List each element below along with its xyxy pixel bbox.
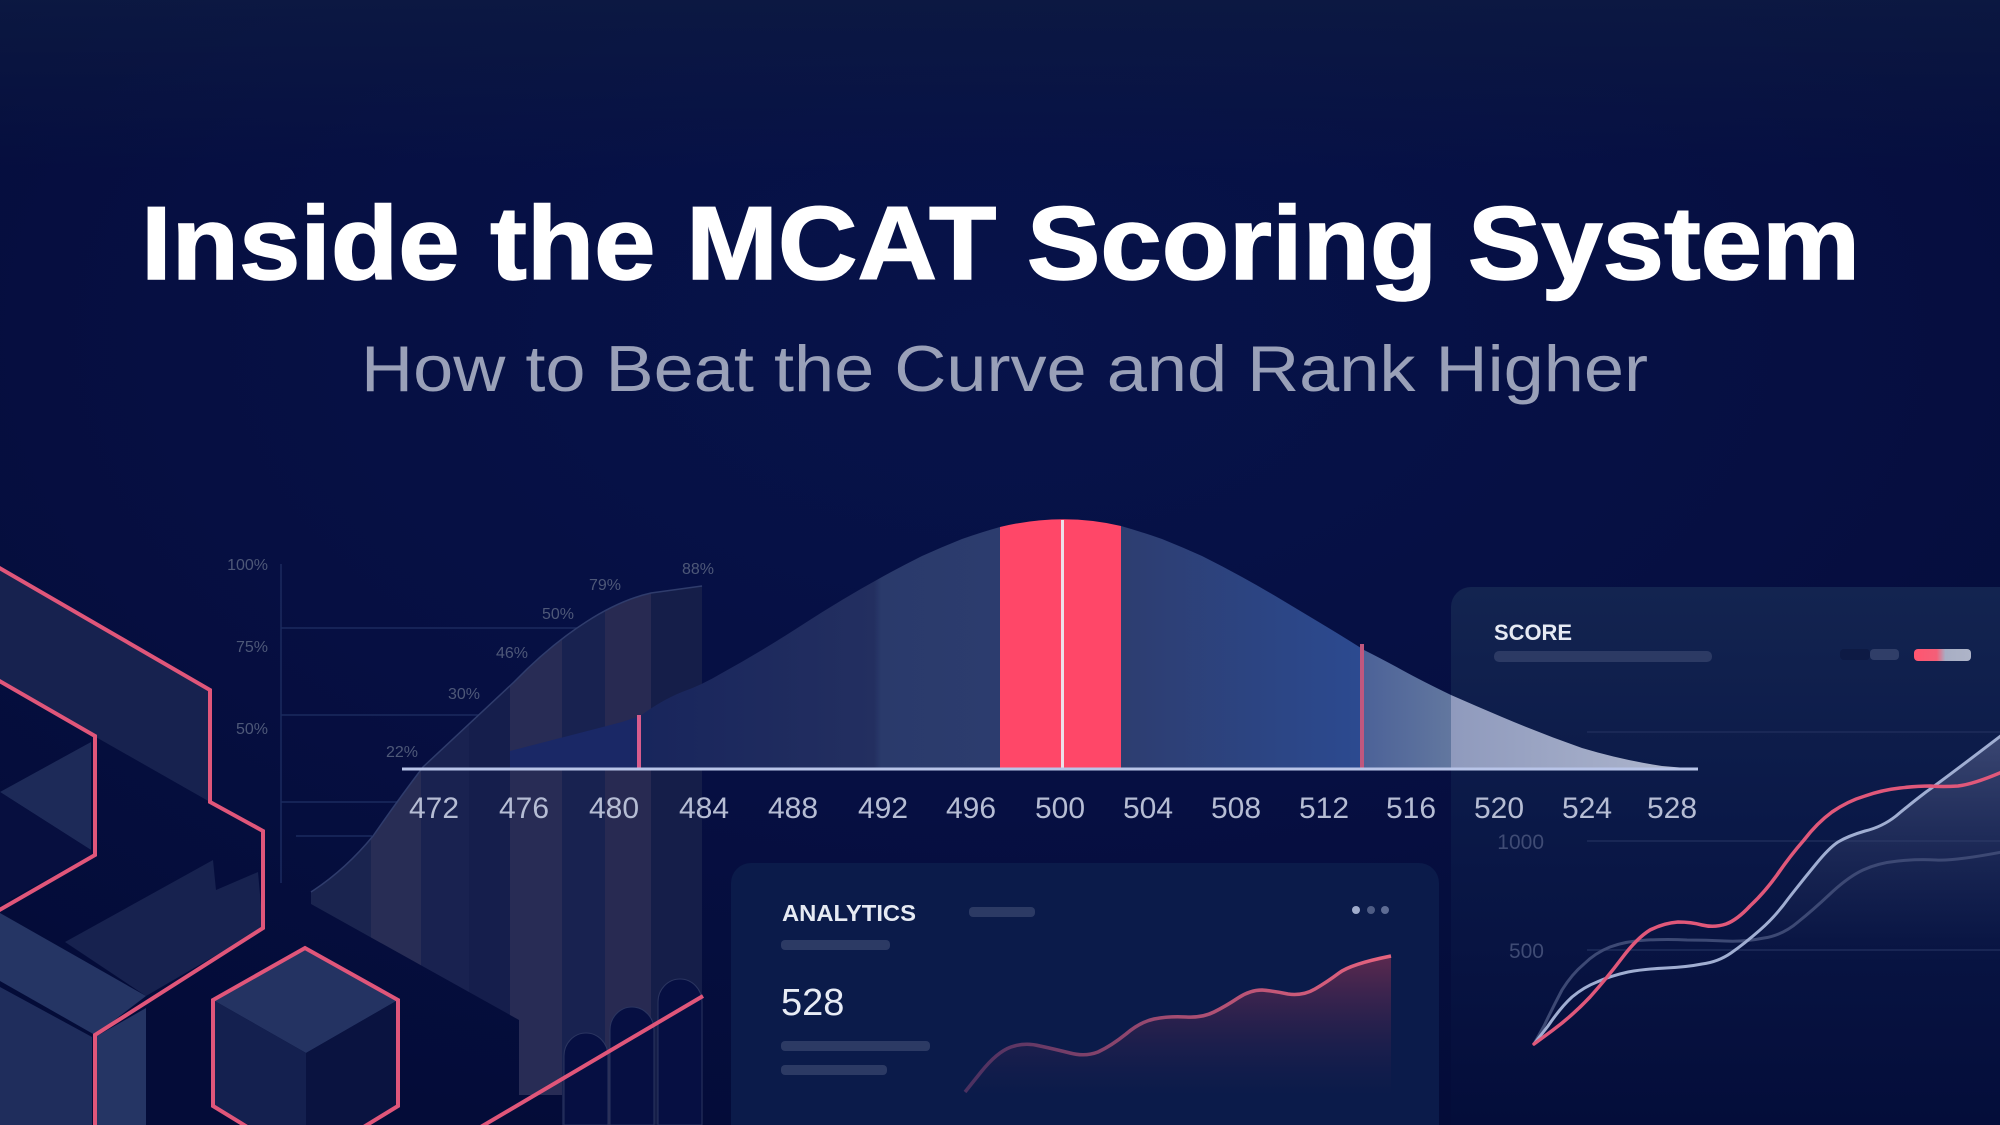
axis line: [402, 768, 1698, 770]
curve outline: [311, 586, 702, 892]
isometric blocks: [0, 566, 703, 1125]
mid band: [65, 860, 263, 996]
percentile labels: 50%: [542, 606, 574, 623]
axis score labels: 524: [1562, 792, 1612, 825]
right mid band: [1364, 650, 1451, 769]
axis score labels: 472: [409, 792, 459, 825]
analytics line: [965, 956, 1391, 1092]
score panel: [1451, 587, 2000, 1125]
chart grid and axis: [281, 564, 702, 883]
analytics heading: ANALYTICS: [782, 900, 916, 926]
bell curve: [402, 519, 1698, 770]
upper band: [0, 568, 210, 802]
analytics panel: [731, 863, 1439, 1125]
percentile labels: 46%: [496, 645, 528, 662]
lower band: [0, 913, 146, 1035]
right body: [1121, 526, 1361, 769]
axis score labels: 516: [1386, 792, 1436, 825]
axis values: 1000: [1497, 831, 1544, 854]
axis score labels: 520: [1474, 792, 1524, 825]
axis score labels: 480: [589, 792, 639, 825]
cumulative curve strips: [311, 580, 702, 1125]
bright tail: [1451, 695, 1698, 769]
dark inner floor: [0, 792, 91, 905]
percentile labels: 22%: [386, 744, 418, 761]
upper percentile marker: [1360, 644, 1364, 769]
far left wedge: [510, 716, 640, 769]
axis score labels: 488: [768, 792, 818, 825]
axis score labels: 508: [1211, 792, 1261, 825]
percentile labels: 30%: [448, 686, 480, 703]
percentile labels: 100%: [227, 557, 268, 574]
axis score labels: 484: [679, 792, 729, 825]
percentile labels: [227, 557, 714, 761]
left body: [640, 527, 1000, 769]
subtitle: How to Beat the Curve and Rank Higher: [361, 332, 1648, 405]
grid: [1587, 732, 2000, 950]
axis score labels: 492: [858, 792, 908, 825]
area under lines: [1730, 735, 2000, 965]
menu dots: [1352, 906, 1389, 914]
axis values: 500: [1509, 940, 1544, 963]
inner facet: [0, 742, 91, 850]
center marker line: [1061, 520, 1064, 769]
grey line: [1534, 852, 2000, 1044]
percentile labels: 50%: [236, 721, 268, 738]
legend pills: [1840, 649, 1971, 661]
lower percentile marker: [637, 715, 641, 769]
percentile labels: 79%: [589, 577, 621, 594]
pink outlines: [0, 566, 703, 1125]
lower strip: [97, 1008, 146, 1125]
axis score labels: 500: [1035, 792, 1085, 825]
axis score labels: 512: [1299, 792, 1349, 825]
red band: [1000, 519, 1121, 769]
light blue line: [1534, 735, 2000, 1044]
analytics value: 528: [781, 982, 844, 1024]
lower block: [0, 987, 92, 1125]
percentile labels: 88%: [682, 561, 714, 578]
hexagon cube right: [306, 1000, 398, 1125]
axis score labels: [409, 792, 1697, 825]
hexagon cube left: [213, 1000, 306, 1125]
score heading: SCORE: [1494, 620, 1572, 645]
red line: [1534, 772, 2000, 1044]
value bars: [781, 1041, 930, 1075]
heading pill: [969, 907, 1035, 917]
title: Inside the MCAT Scoring System: [141, 186, 1860, 302]
arches: [564, 979, 702, 1125]
analytics area: [965, 956, 1391, 1095]
subheading bar: [781, 940, 890, 950]
axis score labels: 528: [1647, 792, 1697, 825]
axis values: [1497, 831, 1544, 963]
axis score labels: 476: [499, 792, 549, 825]
heading bar: [1494, 651, 1712, 662]
percentile labels: 75%: [236, 639, 268, 656]
hexagon cube top: [213, 948, 398, 1053]
axis score labels: 504: [1123, 792, 1173, 825]
cumulative percentile chart: [227, 557, 714, 1125]
axis score labels: 496: [946, 792, 996, 825]
